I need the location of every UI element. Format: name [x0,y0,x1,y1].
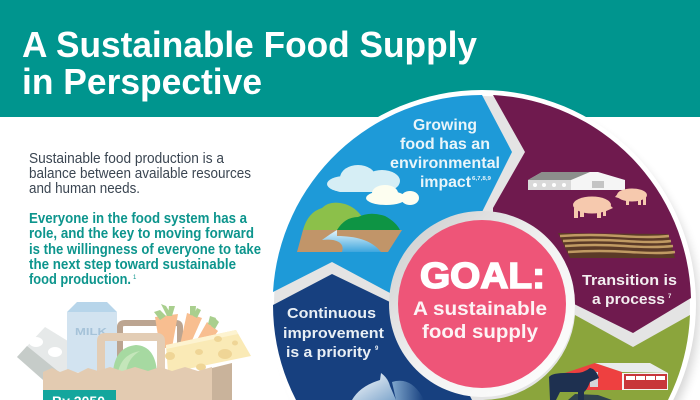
intro text [29,151,251,197]
title text [22,24,478,102]
icon: carrots [154,304,219,348]
icon: pig barn [528,172,625,190]
goal circle [389,211,575,397]
highlighted statement: the next step toward sustainable [29,257,236,273]
highlighted statement: Everyone in the food system has a [29,211,248,227]
highlighted statement [29,211,261,288]
title text: A Sustainable Food Supply [22,24,478,65]
icon: milk carton [67,302,117,372]
icon: front handle [101,337,161,375]
icon: milk carton: MILK [75,327,108,338]
label: by 2050 [43,390,116,400]
icon: back handle [120,323,180,372]
icon: cow [549,368,612,400]
text: transition is a process [582,272,677,308]
icon: cheese [165,330,251,373]
text: goal: GOAL: [420,255,545,296]
text: continuous improvement: Continuous [287,305,376,322]
highlighted statement: food production. [29,272,131,288]
text: continuous improvement: improvement [283,325,384,342]
icon: pigs [573,188,647,218]
text: a sustainable food supply: food supply [422,322,538,343]
text: continuous improvement: 9 [375,346,379,352]
text: transition is a process: a process [592,291,665,308]
panel: continuous improvement [273,274,472,400]
icon: clouds and landscape [297,165,419,252]
highlighted statement: role, and the key to moving forward [29,226,254,242]
icon: bag front [43,367,212,400]
highlighted statement: 1 [133,275,137,281]
intro text: balance between available resources [29,166,251,182]
panel: transition [493,95,691,333]
title text: in Perspective [22,61,262,102]
intro text: Sustainable food production is a [29,151,225,167]
icon: field rows [558,233,675,258]
panel: environmental impact [273,95,512,293]
icon: cattle barn [565,363,668,390]
icon: egg carton [17,327,112,395]
text: a sustainable food supply: A sustainable [413,299,547,320]
text: growing food [390,117,500,191]
text: growing food: food has an [400,136,490,153]
highlighted statement: is the willingness of everyone to take [29,242,261,258]
text: growing food: impact [420,174,471,191]
panel: green farm [483,315,690,400]
text: a sustainable food supply [413,299,547,343]
text: growing food: environmental [390,155,500,172]
intro text: and human needs. [29,181,140,197]
text: growing food: 6,7,8,9 [472,176,491,182]
icon: lettuce [113,345,157,372]
wheel diagram [268,90,699,400]
icon: bag side [212,363,232,400]
text: continuous improvement: is a priority [286,344,372,361]
text: transition is a process: 7 [668,294,672,300]
illustration: grocery bag [17,302,251,400]
icon: cycle arrow [352,373,424,400]
text: transition is a process: Transition is [582,272,677,289]
title banner [0,0,700,117]
text: growing food: Growing [413,117,477,134]
text: continuous improvement [283,305,384,361]
